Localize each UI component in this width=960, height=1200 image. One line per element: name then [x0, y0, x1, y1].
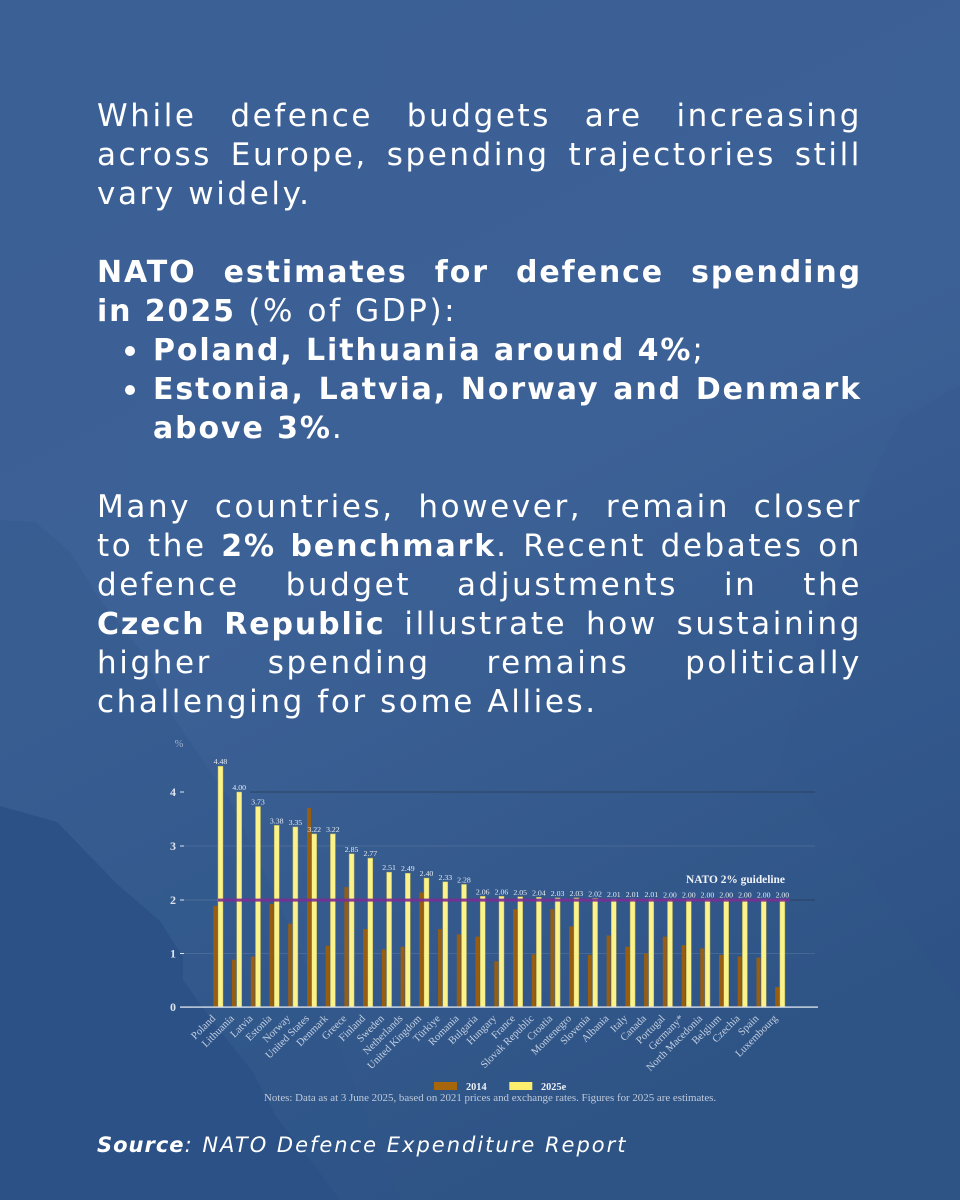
- value labels: 3.73: [251, 798, 265, 806]
- country labels: Denmark: [295, 1013, 331, 1049]
- value labels: 3.35: [289, 818, 302, 827]
- text: intro and NATO estimates: to the 2% benchmark. Recent debates on: [97, 528, 862, 564]
- legend: 2025e: [541, 1082, 567, 1093]
- NATO 2% guideline line: [218, 899, 790, 902]
- country labels: Netherlands: [361, 1013, 405, 1057]
- x axis: [180, 1006, 818, 1008]
- value labels: 2.33: [438, 873, 452, 882]
- text: intro and NATO estimates: Czech Republic illustrate how sustaining: [97, 606, 862, 642]
- text: intro and NATO estimates: Source: NATO Defence Expenditure Report: [97, 1133, 628, 1157]
- value labels: 2.51: [382, 863, 396, 872]
- country labels: Lithuania: [200, 1013, 237, 1050]
- value labels: 2.03: [570, 889, 583, 898]
- y axis: 1: [170, 946, 176, 960]
- value labels: 2.00: [738, 890, 752, 900]
- value labels: 2.03: [551, 889, 565, 898]
- country labels: Hungary: [465, 1013, 500, 1047]
- country labels: Romania: [427, 1013, 462, 1048]
- value labels: 2.77: [363, 849, 377, 858]
- text: intro and NATO estimates: Estonia, Latvia, Norway and Denmark: [153, 372, 862, 407]
- country labels: Croatia: [525, 1013, 555, 1043]
- country labels: Slovenia: [559, 1013, 593, 1047]
- value labels: 2.02: [588, 889, 602, 898]
- text: intro and NATO estimates: challenging for some Allies.: [97, 684, 598, 720]
- country labels: Sweden: [355, 1013, 387, 1045]
- text: intro and NATO estimates: higher spending remains politically: [97, 645, 862, 681]
- country labels: Finland: [337, 1013, 368, 1044]
- country labels: Poland: [190, 1013, 219, 1042]
- value labels: 2.00: [776, 890, 789, 900]
- country labels: Türkiye: [411, 1013, 443, 1045]
- country labels: Bulgaria: [447, 1013, 481, 1047]
- country labels: Montenegro: [530, 1013, 574, 1058]
- text: intro and NATO estimates: in 2025 (% of GDP):: [97, 293, 457, 329]
- value labels: 4.00: [232, 783, 246, 792]
- text: intro and NATO estimates: vary widely.: [97, 176, 312, 212]
- country labels: Estonia: [244, 1013, 275, 1044]
- country labels: North Macedonia: [645, 1013, 705, 1074]
- value labels: 3.22: [307, 825, 321, 834]
- text: intro and NATO estimates: Many countries, however, remain closer: [97, 488, 862, 524]
- country labels: Slovak Republic: [479, 1013, 537, 1071]
- country labels: Greece: [320, 1013, 349, 1042]
- y axis: 4: [170, 785, 176, 799]
- y axis: 2: [170, 893, 176, 907]
- value labels: 2.05: [513, 888, 527, 897]
- legend: [434, 1082, 567, 1093]
- series 2025e: [218, 766, 785, 1007]
- y axis: 3: [170, 839, 176, 853]
- value labels: 2.28: [457, 875, 471, 884]
- value labels: 3.38: [270, 816, 284, 825]
- country labels: Luxembourg: [734, 1013, 781, 1060]
- country labels: Italy: [609, 1013, 631, 1035]
- text: intro and NATO estimates: NATO estimates for defence spending: [97, 255, 862, 290]
- legend: 2014: [466, 1082, 487, 1093]
- value labels: 2.06: [495, 887, 508, 896]
- country labels: Germany*: [647, 1013, 686, 1053]
- country labels: Latvia: [229, 1013, 256, 1040]
- country labels: Albania: [580, 1013, 612, 1045]
- value labels: 2.00: [757, 890, 771, 900]
- y axis: %: [175, 739, 184, 750]
- NATO guideline label: NATO 2% guideline: [686, 874, 785, 886]
- value labels: 2.49: [401, 864, 415, 873]
- value labels: 2.00: [701, 890, 714, 900]
- y axis: [170, 739, 184, 1014]
- chart notes: Notes: Data as at 3 June 2025, based on 2021 prices and exchange rates. Figures for 2025 are estimates.: [264, 1092, 716, 1104]
- value labels: 2.00: [663, 890, 677, 900]
- country labels: Czechia: [711, 1013, 743, 1045]
- value labels: 2.04: [532, 888, 546, 897]
- text: intro and NATO estimates: Poland, Lithuania around 4%;: [153, 332, 705, 368]
- country labels: Portugal: [634, 1013, 668, 1047]
- value labels: [214, 757, 789, 900]
- text: intro and NATO estimates: across Europe, spending trajectories still: [97, 137, 862, 173]
- y axis: 0: [170, 1000, 176, 1014]
- value labels: 3.22: [326, 825, 340, 834]
- country labels: Belgium: [690, 1013, 724, 1047]
- value labels: 2.01: [644, 890, 658, 899]
- value labels: 2.00: [719, 890, 733, 900]
- value labels: 2.85: [345, 845, 359, 854]
- value labels: 2.01: [626, 890, 640, 899]
- value labels: 2.40: [420, 869, 433, 878]
- country labels: Spain: [736, 1013, 762, 1038]
- country labels: Norway: [261, 1013, 294, 1045]
- country labels: [190, 1013, 781, 1074]
- text: intro and NATO estimates: While defence budgets are increasing: [97, 98, 862, 134]
- country labels: Canada: [619, 1013, 649, 1044]
- country labels: United States: [264, 1013, 312, 1061]
- country labels: France: [490, 1013, 518, 1042]
- text: intro and NATO estimates: defence budget adjustments in the: [97, 567, 862, 603]
- value labels: 2.06: [476, 887, 490, 896]
- value labels: 4.48: [214, 757, 227, 766]
- series 2014: [213, 808, 779, 1007]
- text: intro and NATO estimates: above 3%.: [153, 410, 344, 446]
- value labels: 2.00: [682, 890, 696, 900]
- country labels: United Kingdom: [366, 1013, 425, 1072]
- value labels: 2.01: [607, 890, 621, 899]
